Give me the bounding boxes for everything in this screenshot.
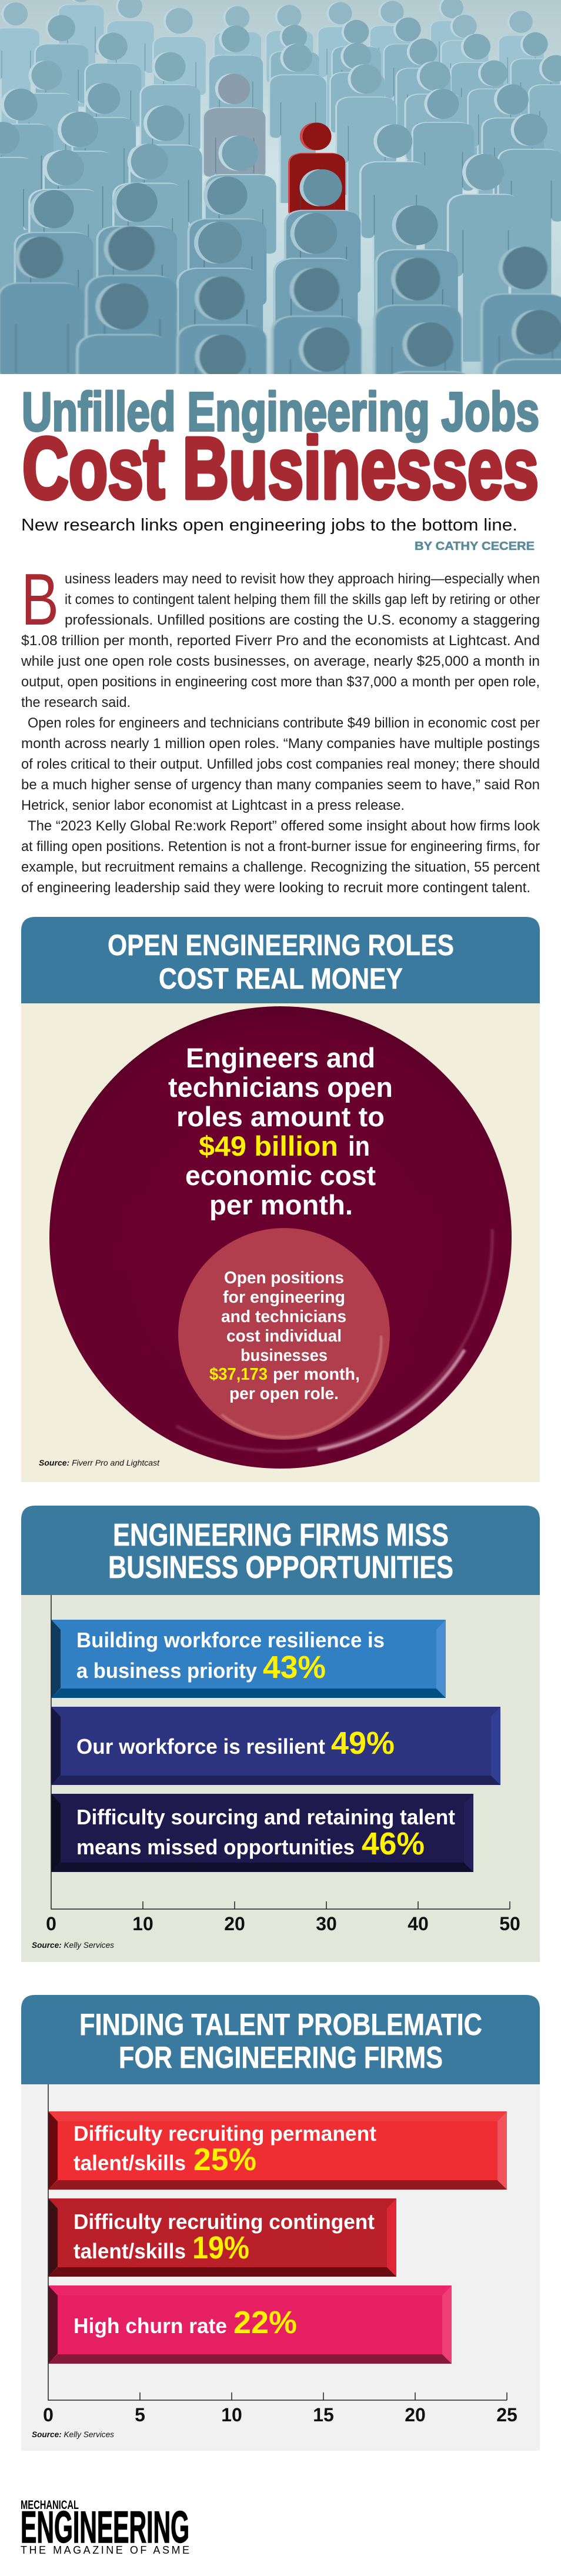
large circle: 49 billion: [49, 1006, 512, 1469]
source note: Source: Fiverr Pro and Lightcast: [39, 1458, 160, 1467]
small circle: 37,173 per month: [178, 1228, 390, 1440]
small circle: 37,173 per month: and technicians: [221, 1307, 346, 1326]
large circle: 49 billion: Engineers and: [186, 1042, 375, 1073]
article text: [21, 559, 540, 896]
panel heading: ENGINEERING FIRMS MISS: [113, 1517, 449, 1553]
bar: our workforce is resilient 49%: [51, 1707, 500, 1785]
panel heading: FINDING TALENT PROBLEMATIC: [79, 2008, 482, 2042]
bar chart: [46, 1595, 520, 1934]
article text: be a much higher sense of urgency than many companies seem to have,” said Ron: [21, 777, 540, 793]
article text: $1.08 trillion per month, reported Fiverr Pro and the economists at Lightcast. And: [21, 633, 540, 649]
bar: high churn rate 22%: [48, 2285, 452, 2364]
chart axes: 30: [316, 1913, 337, 1934]
bar: our workforce is resilient 49%: Our workforce is resilient: [76, 1734, 325, 1759]
panel heading: [21, 917, 540, 1003]
large circle: 49 billion: technicians open: [168, 1072, 393, 1103]
chart axes: 0: [43, 2404, 54, 2425]
article text: at filling open positions. Retention is not a front-burner issue for engineering firms, for: [21, 839, 540, 855]
panel heading: OPEN ENGINEERING ROLES: [108, 929, 454, 962]
article text: B: [21, 559, 59, 640]
panel heading: [21, 1995, 540, 2084]
bar: building workforce resilience 43%: [51, 1620, 446, 1698]
article text: output, open positions in engineering cost more than $37,000 a month per open role,: [21, 674, 540, 690]
small circle: 37,173 per month: Open positions: [224, 1269, 344, 1287]
small circle: 37,173 per month: cost individual: [226, 1327, 342, 1346]
panel heading: COST REAL MONEY: [159, 962, 403, 995]
logo: Mechanical Engineering, the magazine of ASME: THE MAGAZINE OF ASME: [21, 2544, 189, 2556]
bar: difficulty recruiting permanent 25%: talent/skills: [74, 2151, 186, 2175]
subtitle: New research links open engineering jobs to the bottom line.: [21, 516, 517, 535]
panel: engineering firms miss business opportunities: [21, 1506, 540, 1962]
large circle: 49 billion: economic cost: [185, 1160, 376, 1191]
bar: difficulty recruiting contingent 19%: [48, 2198, 396, 2277]
panel heading: [21, 1506, 540, 1595]
bar: difficulty recruiting permanent 25%: 25%: [193, 2142, 256, 2177]
chart axes: 15: [313, 2404, 334, 2425]
source note: Source: Kelly Services: [32, 2430, 114, 2439]
small circle: 37,173 per month: per open role.: [229, 1384, 339, 1403]
byline: BY CATHY CECERE: [415, 540, 535, 553]
panel heading: BUSINESS OPPORTUNITIES: [108, 1550, 453, 1585]
article text: The “2023 Kelly Global Re:work Report” offered some insight about how firms look: [28, 818, 540, 834]
chart axes: 10: [221, 2404, 242, 2425]
bar: difficulty sourcing and retaining talent 46%: means missed opportunities: [76, 1835, 355, 1859]
chart axes: 40: [408, 1913, 429, 1934]
logo: Mechanical Engineering, the magazine of ASME: [21, 2498, 189, 2556]
chart axes: 20: [405, 2404, 426, 2425]
bar: building workforce resilience 43%: Building workforce resilience is: [76, 1628, 385, 1652]
bar: our workforce is resilient 49%: 49%: [331, 1726, 395, 1761]
bar chart: [43, 2084, 517, 2425]
logo: Mechanical Engineering, the magazine of ASME: ENGINEERING: [21, 2502, 189, 2552]
article text: Hetrick, senior labor economist at Lightcast in a press release.: [21, 798, 405, 813]
chart axes: [46, 1595, 520, 1934]
title: [22, 381, 539, 517]
logo: Mechanical Engineering, the magazine of ASME: MECHANICAL: [21, 2498, 79, 2512]
article text: of engineering leadership said they were looking to recruit more contingent talent.: [21, 880, 530, 896]
bar: building workforce resilience 43%: a business priority: [76, 1659, 257, 1683]
panel: open engineering roles cost real money: [21, 917, 540, 1482]
source note: Source: Kelly Services: [32, 1940, 114, 1950]
bar: difficulty sourcing and retaining talent 46%: Difficulty sourcing and retaining talent: [76, 1805, 455, 1829]
bar: high churn rate 22%: 22%: [233, 2305, 297, 2340]
bar: difficulty sourcing and retaining talent 46%: 46%: [362, 1826, 425, 1861]
chart axes: 5: [135, 2404, 145, 2425]
article text: it comes to contingent talent helping them fill the skills gap left by retiring or other: [65, 592, 540, 608]
chart axes: [43, 2084, 517, 2425]
panel: finding talent problematic for engineering firms: [21, 1995, 540, 2451]
bar: difficulty recruiting contingent 19%: 19%: [192, 2230, 249, 2265]
chart axes: 10: [132, 1913, 153, 1934]
small circle: 37,173 per month: businesses: [241, 1346, 328, 1365]
large circle: 49 billion: in: [348, 1130, 370, 1162]
bar: difficulty recruiting permanent 25%: Difficulty recruiting permanent: [74, 2121, 376, 2145]
large circle: 49 billion: roles amount to: [176, 1101, 385, 1132]
article text: example, but recruitment remains a challenge. Recognizing the situation, 55 percent: [21, 859, 540, 875]
small circle: 37,173 per month: for engineering: [223, 1288, 345, 1307]
bar: difficulty recruiting permanent 25%: [48, 2111, 507, 2190]
article text: of roles critical to their output. Unfilled jobs cost companies real money; there should: [21, 756, 540, 772]
small circle: 37,173 per month: per month,: [273, 1365, 360, 1384]
bar: difficulty recruiting contingent 19%: talent/skills: [74, 2239, 186, 2263]
panel heading: FOR ENGINEERING FIRMS: [119, 2041, 443, 2075]
chart axes: 20: [224, 1913, 245, 1934]
article text: the research said.: [21, 695, 131, 710]
article text: month across nearly 1 million open roles. “Many companies have multiple postings: [21, 736, 540, 752]
bar: building workforce resilience 43%: 43%: [263, 1650, 326, 1685]
hero photo: crowd of blue figures with one red figure: [0, 0, 561, 374]
chart axes: 25: [496, 2404, 517, 2425]
article text: usiness leaders may need to revisit how they approach hiring—especially when: [65, 571, 540, 587]
chart axes: 50: [499, 1913, 520, 1934]
large circle: 49 billion: per month.: [209, 1189, 353, 1220]
article text: Open roles for engineers and technicians contribute $49 billion in economic cost per: [28, 715, 540, 731]
article text: while just one open role costs businesses, on average, nearly $25,000 a month in: [21, 653, 540, 669]
bar: difficulty sourcing and retaining talent 46%: [51, 1794, 473, 1872]
bar: high churn rate 22%: High churn rate: [74, 2314, 227, 2338]
article text: professionals. Unfilled positions are costing the U.S. economy a staggering: [65, 612, 540, 628]
chart axes: 0: [46, 1913, 56, 1934]
small circle: 37,173 per month: $37,173: [209, 1365, 268, 1384]
bar: difficulty recruiting contingent 19%: Difficulty recruiting contingent: [74, 2210, 375, 2234]
large circle: 49 billion: $49 billion: [199, 1130, 338, 1162]
